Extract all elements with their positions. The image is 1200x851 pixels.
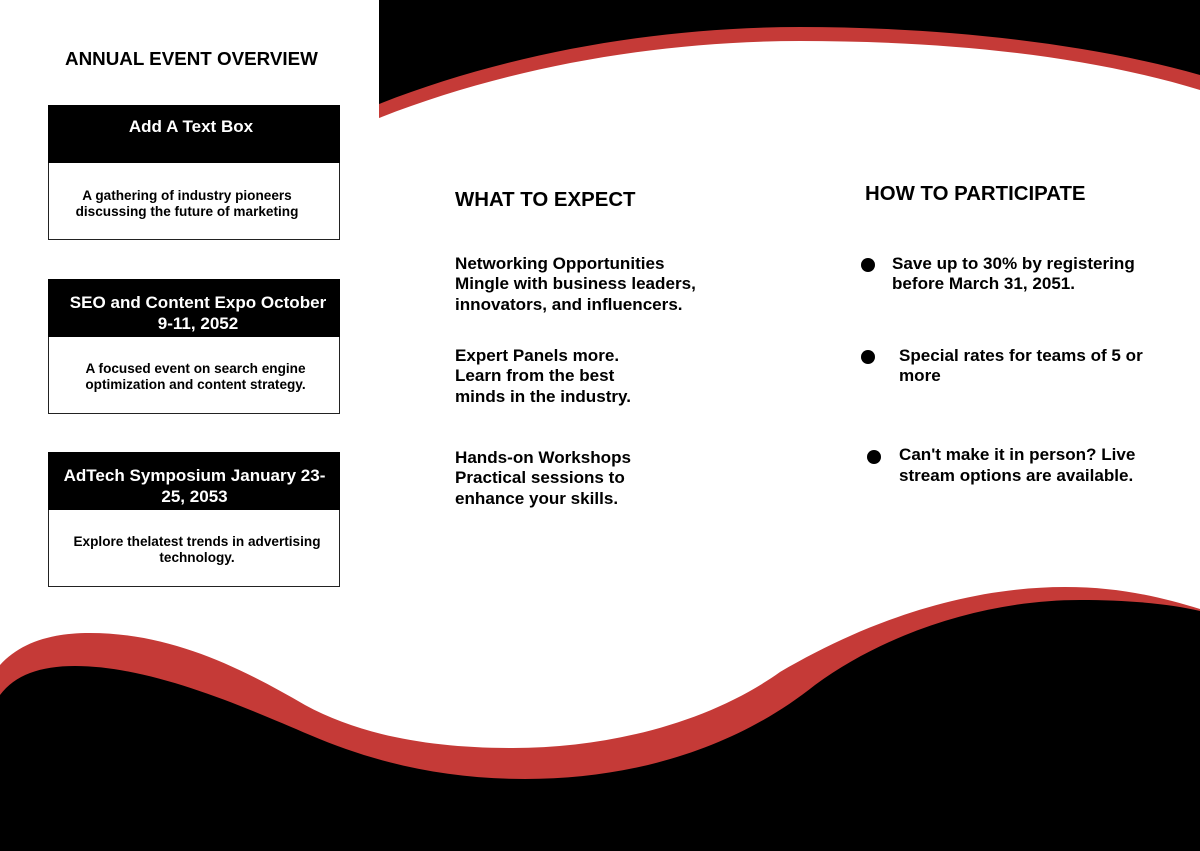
text: live stream [899,445,1135,484]
icon: bullet 2 [861,350,875,364]
heading: how to participate: HOW TO PARTICIPATE [865,183,1086,205]
card 2 description: optimization and content strategy. [85,377,306,392]
heading: what to expect: WHAT TO EXPECT [455,189,636,211]
card 3 header [48,452,340,510]
text: networking opportunities: innovators, and influencers. [455,294,683,314]
card 3 description: Explore thelatest trends in advertising [73,534,321,549]
text: hands-on workshops: enhance your skills. [455,488,618,508]
card 3 heading [64,466,325,506]
card 3 description [73,534,321,565]
text: early registration: before March 31, 2051. [892,274,1075,293]
icon: bullet 3 [867,450,881,464]
text: live stream: stream options are available. [899,466,1133,484]
card 3 heading: 25, 2053 [161,487,228,506]
text: hands-on workshops [455,448,631,508]
card 3 description: technology. [159,550,235,565]
text: hands-on workshops: Practical sessions to [455,468,625,487]
panel: event card 1 [48,105,340,240]
text: early registration: Save up to 30% by registering [892,254,1135,272]
text: team rates [899,346,1143,385]
text: networking opportunities: Mingle with business leaders, [455,274,696,293]
card 1 description [76,188,298,219]
icon: bullet 1 [860,258,874,272]
card 1 description: discussing the future of marketing [76,204,298,219]
card 2 heading: 9-11, 2052 [158,314,238,333]
text: live stream: Can't make it in person? Live [899,445,1135,464]
card 2 header [48,279,340,337]
text: networking opportunities [455,254,696,314]
card 3 heading: AdTech Symposium January 23- [64,466,325,485]
panel: event card 3 [48,452,340,587]
text: team rates: more [899,366,941,385]
text: team rates: Special rates for teams of 5 or [899,346,1143,364]
card 1 description: A gathering of industry pioneers [82,188,292,203]
card 2 description [85,361,306,392]
card 2 description: A focused event on search engine [85,361,306,376]
text: hands-on workshops: Hands-on Workshops [455,448,631,466]
title: annual event overview: ANNUAL EVENT OVERVIEW [65,48,318,69]
text: networking opportunities: Networking Opportunities [455,254,664,272]
text: expert panels: minds in the industry. [455,386,631,406]
card 1 header [48,105,340,163]
text: expert panels: Learn from the best [455,366,614,385]
card 2 heading [70,293,326,333]
text: expert panels: Expert Panels more. [455,346,619,364]
text: expert panels [455,346,631,406]
panel: event card 2 [48,279,340,414]
card 2 heading: SEO and Content Expo October [70,293,326,312]
top wave band [379,0,1200,118]
card 1 heading: Add A Text Box [129,117,253,136]
text: early registration [892,254,1135,293]
